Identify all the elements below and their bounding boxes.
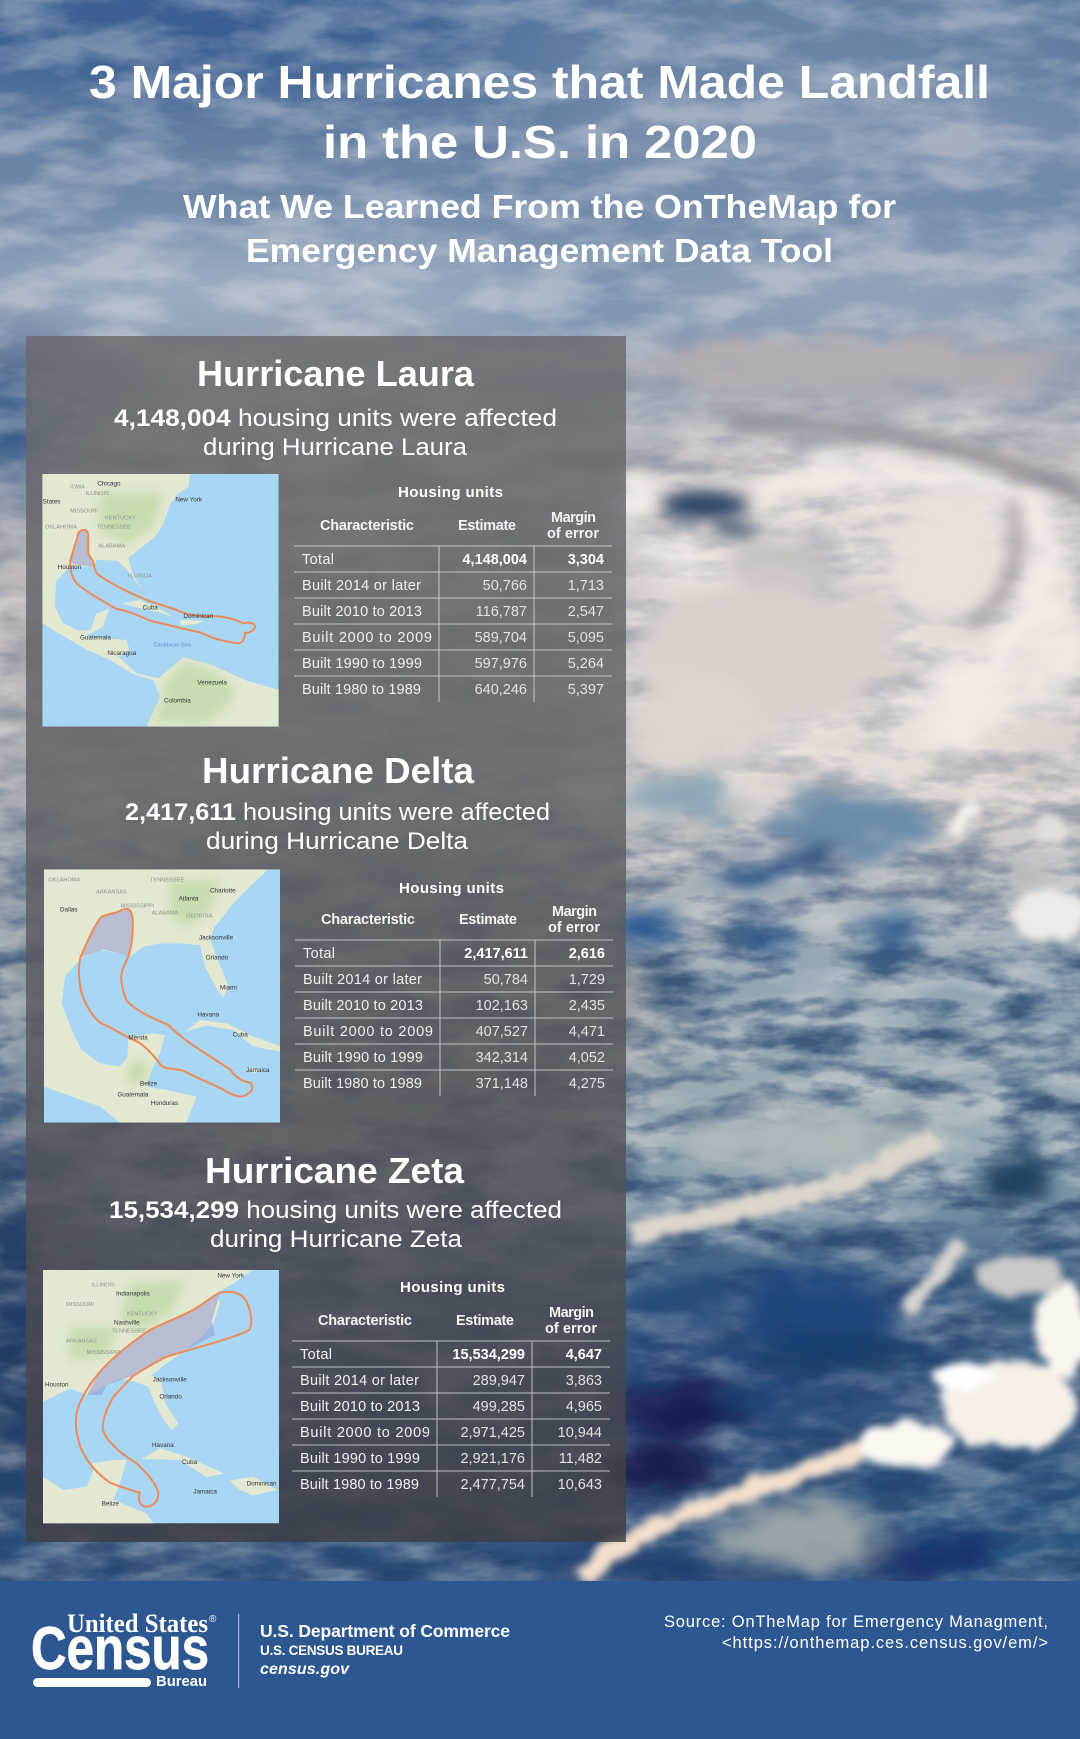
table: Laura housing units: 597,976 (475, 656, 527, 672)
map: Hurricane Delta path: OKLAHOMA (48, 877, 81, 883)
map: Hurricane Zeta path: Houston (45, 1382, 69, 1389)
map: Hurricane Zeta path: MISSISSIPPI (87, 1350, 121, 1356)
map: Hurricane Laura path: Dominican (183, 613, 214, 620)
map: Hurricane Delta path: GEORGIA (186, 914, 213, 920)
text: source: <https://onthemap.ces.census.gov/em/> (722, 1634, 1048, 1652)
table: Laura housing units: 640,246 (475, 682, 527, 698)
table: Delta housing units: Built 2014 or later (303, 972, 422, 988)
title: in the U.S. in 2020 (323, 116, 757, 168)
table: Delta housing units: Total (303, 946, 335, 962)
table: Laura housing units: 3,304 (568, 552, 604, 568)
table: Laura housing units: 5,397 (568, 682, 604, 698)
table: Zeta housing units: 4,647 (566, 1347, 602, 1363)
map: Hurricane Laura path: Houston (58, 564, 82, 571)
table: Delta housing units: Built 1980 to 1989 (303, 1076, 422, 1092)
table: Zeta housing units: 15,534,299 (452, 1347, 525, 1363)
map: Hurricane Laura path: ALABAMA (98, 543, 125, 549)
map: Hurricane Delta path: Mérida (128, 1034, 148, 1041)
table: Delta housing units: 50,784 (484, 972, 528, 988)
map: Hurricane Laura path: States (43, 499, 61, 506)
table: Zeta housing units: Built 2014 or later (300, 1373, 419, 1389)
table: Zeta housing units: Estimate (456, 1313, 514, 1329)
map: Hurricane Zeta path: MISSOURI (66, 1302, 94, 1308)
table: Delta housing units: 1,729 (569, 972, 605, 988)
table: Laura housing units: Built 1980 to 1989 (302, 682, 421, 698)
table: Delta housing units: Characteristic (321, 912, 415, 928)
text: source: Source: OnTheMap for Emergency Managment, (664, 1613, 1048, 1631)
map: Hurricane Laura path: TENNESSEE (97, 525, 131, 531)
table: Delta housing units: 4,052 (569, 1050, 605, 1066)
subtitle (183, 188, 896, 269)
map: Hurricane Delta path: Orlando (206, 954, 229, 961)
table: Delta housing units: 2,616 (569, 946, 605, 962)
map: Hurricane Zeta path: Jacksonville (153, 1376, 187, 1383)
logo: United States Census Bureau: Census (31, 1615, 209, 1682)
table: Zeta housing units: 10,944 (558, 1425, 602, 1441)
map: Hurricane Delta path: Jamaica (246, 1067, 270, 1074)
subtitle: What We Learned From the OnTheMap for (183, 188, 896, 225)
table: Zeta housing units: Built 2010 to 2013 (300, 1399, 420, 1415)
title (89, 56, 990, 168)
table: Laura housing units: Built 1990 to 1999 (302, 656, 422, 672)
table: Laura housing units: 1,713 (568, 578, 604, 594)
map: Hurricane Delta path: Belize (140, 1081, 158, 1088)
table: Zeta housing units (292, 1279, 610, 1497)
map: Hurricane Zeta path: New York (217, 1272, 245, 1279)
map: Hurricane Zeta path: Orlando (159, 1393, 182, 1400)
table: Laura housing units: Built 2014 or later (302, 578, 421, 594)
map: Hurricane Laura path: Chicago (97, 480, 121, 487)
table: Laura housing units: Estimate (458, 518, 516, 534)
map: Hurricane Zeta path: TENNESSEE (112, 1328, 146, 1334)
table: Laura housing units: Housing units (398, 484, 503, 501)
table: Laura housing units: Margin (551, 510, 596, 526)
footer band (0, 1581, 1080, 1739)
table: Laura housing units: 5,264 (568, 656, 604, 672)
table: Delta housing units: Built 2000 to 2009 (303, 1024, 433, 1040)
map: Hurricane Delta path: Charlotte (210, 887, 236, 894)
logo: United States Census Bureau: Bureau (156, 1673, 207, 1690)
table: Zeta housing units: 4,965 (566, 1399, 602, 1415)
table: Laura housing units: 4,148,004 (462, 552, 527, 568)
table: Laura housing units: 5,095 (568, 630, 604, 646)
table: Zeta housing units: Built 1980 to 1989 (300, 1477, 419, 1493)
map: Hurricane Zeta path: ARKANSAS (66, 1338, 97, 1344)
text: Zeta housing units affected (109, 1197, 562, 1253)
text: Zeta housing units affected: during Hurricane Zeta (210, 1226, 463, 1253)
table: Zeta housing units: Built 2000 to 2009 (300, 1425, 430, 1441)
table: Zeta housing units: 2,971,425 (460, 1425, 525, 1441)
map: Hurricane Laura path: Caribbean Sea (153, 643, 192, 649)
table: Delta housing units: 342,314 (476, 1050, 528, 1066)
text: Laura housing units affected: 4,148,004 housing units were affected (114, 405, 557, 432)
map: Hurricane Laura path: KENTUCKY (105, 515, 136, 521)
table: Zeta housing units: 499,285 (473, 1399, 525, 1415)
map: Hurricane Delta path: TENNESSEE (150, 877, 184, 883)
table: Delta housing units: Estimate (459, 912, 517, 928)
text: Delta housing units affected (125, 799, 550, 855)
map: Hurricane Laura path: FLORIDA (127, 573, 152, 579)
table: Delta housing units: Housing units (399, 880, 504, 897)
heading: Hurricane Zeta: Hurricane Zeta (205, 1150, 465, 1191)
text: Delta housing units affected: during Hurricane Delta (206, 828, 469, 855)
table: Laura housing units: Built 2010 to 2013 (302, 604, 422, 620)
table: Delta housing units: Built 1990 to 1999 (303, 1050, 423, 1066)
table: Delta housing units: 4,471 (569, 1024, 605, 1040)
table: Zeta housing units: Total (300, 1347, 332, 1363)
storm cloud mass (20, 360, 1080, 1580)
map: Hurricane Zeta path: Nashville (114, 1320, 140, 1327)
text: Laura housing units affected: during Hurricane Laura (203, 434, 468, 461)
map: Hurricane Laura path: MISSOURI (70, 509, 98, 515)
map: Hurricane Laura path: Colombia (164, 697, 191, 704)
map: Hurricane Delta path: MISSISSIPPI (121, 903, 155, 909)
table: Zeta housing units: 2,477,754 (460, 1477, 525, 1493)
map: Hurricane Delta path: Guatemala (117, 1092, 149, 1099)
map: Hurricane Zeta path: Havana (152, 1442, 174, 1449)
map: Hurricane Laura path: New York (175, 496, 203, 503)
text: Delta housing units affected: 2,417,611 housing units were affected (125, 799, 550, 826)
map: Hurricane Delta path: Jacksonville (199, 934, 234, 941)
table: Zeta housing units: 289,947 (473, 1373, 525, 1389)
map: Hurricane Delta path: Dallas (60, 907, 78, 914)
map: Hurricane Delta path: ARKANSAS (96, 889, 127, 895)
heading: Hurricane Delta: Hurricane Delta (202, 750, 475, 791)
text: agency names: census.gov (260, 1661, 350, 1678)
text: Zeta housing units affected: 15,534,299 housing units were affected (109, 1197, 562, 1224)
text: Laura housing units affected (114, 405, 557, 461)
heading: Hurricane Laura: Hurricane Laura (197, 353, 475, 394)
map: Hurricane Zeta path: Belize (102, 1500, 119, 1507)
cloud bands lower right (582, 800, 1080, 1578)
map: Hurricane Laura path: IOWA (70, 484, 85, 490)
panel: hurricanes (26, 336, 626, 1542)
map: Hurricane Laura path (42, 474, 279, 727)
table: Zeta housing units: 11,482 (559, 1451, 602, 1467)
table: Delta housing units: 2,417,611 (464, 946, 528, 962)
map: Hurricane Laura path: Guatemala (80, 635, 111, 642)
map: Hurricane Delta path: Miami (220, 984, 237, 991)
table: Delta housing units: 4,275 (569, 1076, 605, 1092)
table: Laura housing units: Built 2000 to 2009 (302, 630, 432, 646)
table: Delta housing units: Built 2010 to 2013 (303, 998, 423, 1014)
table: Delta housing units: 371,148 (476, 1076, 528, 1092)
table: Delta housing units: 2,435 (569, 998, 605, 1014)
map: Hurricane Laura path: OKLAHOMA (45, 525, 77, 531)
map: Hurricane Delta path: Atlanta (179, 896, 199, 903)
map: Hurricane Delta path: Honduras (151, 1100, 178, 1107)
text: agency names: U.S. Department of Commerce (260, 1621, 510, 1641)
table: Laura housing units: 589,704 (475, 630, 527, 646)
dark ocean gaps (550, 776, 1080, 1580)
table: Delta housing units: Margin (552, 904, 597, 920)
map: Hurricane Laura path: ILLINOIS (86, 491, 109, 497)
table: Zeta housing units: 2,921,176 (460, 1451, 525, 1467)
table: Zeta housing units: 10,643 (558, 1477, 602, 1493)
map: Hurricane Laura path: Cuba (143, 605, 158, 612)
map: Hurricane Delta path: Havana (197, 1012, 220, 1019)
table: Zeta housing units: Built 1990 to 1999 (300, 1451, 420, 1467)
table: Laura housing units: Characteristic (320, 518, 414, 534)
table: Delta housing units (295, 880, 613, 1096)
map: Hurricane Zeta path: ILLINOIS (92, 1282, 115, 1288)
subtitle: Emergency Management Data Tool (246, 232, 833, 269)
table: Delta housing units: 102,163 (476, 998, 528, 1014)
map: Hurricane Zeta path: Jamaica (193, 1488, 217, 1495)
table: Delta housing units: 407,527 (476, 1024, 528, 1040)
text: agency names (260, 1621, 510, 1678)
map: Hurricane Zeta path: Indianapolis (116, 1290, 150, 1297)
table: Laura housing units: of error (547, 526, 599, 542)
table: Laura housing units: 2,547 (568, 604, 604, 620)
map: Hurricane Zeta path: Cuba (182, 1459, 198, 1466)
text: agency names: U.S. CENSUS BUREAU (260, 1643, 403, 1658)
table: Zeta housing units: Characteristic (318, 1313, 412, 1329)
map: Hurricane Laura path: Venezuela (197, 679, 227, 686)
map: Hurricane Zeta path (43, 1270, 279, 1523)
title: 3 Major Hurricanes that Made Landfall (89, 56, 990, 108)
table: Laura housing units: 116,787 (476, 604, 527, 620)
map: Hurricane Delta path: Cuba (233, 1032, 248, 1039)
logo: United States Census Bureau: ® (209, 1614, 217, 1625)
table: Zeta housing units: 3,863 (566, 1373, 602, 1389)
table: Laura housing units (294, 484, 612, 702)
table: Delta housing units: of error (548, 920, 600, 936)
map: Hurricane Zeta path: KENTUCKY (127, 1311, 158, 1317)
map: Hurricane Delta path: ALABAMA (152, 910, 179, 916)
table: Zeta housing units: of error (545, 1321, 597, 1337)
hurricane eye wall and bands (614, 337, 1080, 770)
text: source (664, 1613, 1048, 1652)
table: Zeta housing units: Margin (549, 1305, 594, 1321)
map: Hurricane Zeta path: Dominican (247, 1480, 277, 1487)
table: Zeta housing units: Housing units (400, 1279, 505, 1296)
table: Laura housing units: Total (302, 552, 334, 568)
table: Laura housing units: 50,766 (483, 578, 527, 594)
map: Hurricane Laura path: Nicaragua (107, 650, 137, 657)
logo: United States Census Bureau: United States (67, 1609, 208, 1638)
map: Hurricane Delta path (44, 869, 280, 1123)
